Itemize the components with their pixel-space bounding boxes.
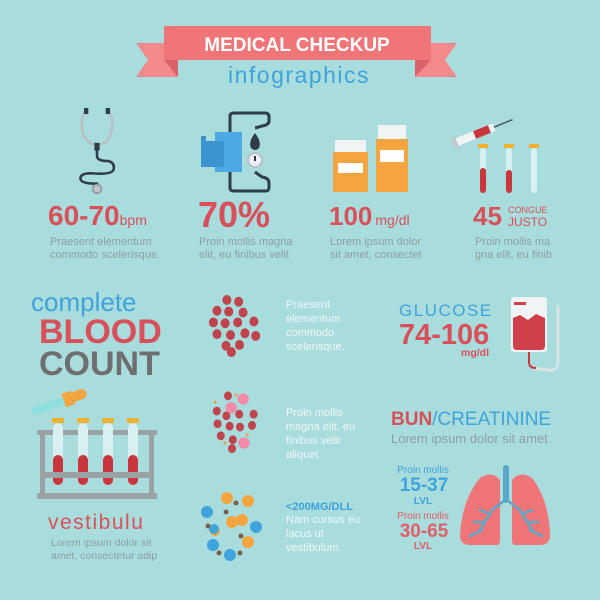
icon: blood pressure cuff	[201, 113, 269, 191]
text: cells note 2: finibus velit	[286, 435, 340, 447]
heading: complete blood count: COUNT	[39, 345, 160, 383]
text: vestibulu	[48, 511, 157, 562]
stat: heart rate	[48, 200, 160, 261]
text: cells note 3: <200MG/DLL	[286, 501, 353, 513]
icon: lungs	[460, 465, 550, 545]
text: cells note 1: scelerisque.	[286, 341, 345, 353]
icon: red blood cells	[209, 295, 260, 357]
text: cells note 3: lacus ut	[286, 528, 324, 540]
icon: mixed blood cells	[213, 391, 258, 453]
text: cells note 1: Praesent	[286, 299, 330, 311]
stat: 15-37: Proin mollis	[397, 465, 449, 476]
icon: pill bottles	[333, 125, 408, 192]
title ribbon: MEDICAL CHECKUP	[204, 35, 390, 56]
heading: bun/creatinine	[391, 409, 551, 446]
stat: 45: Proin mollis ma	[475, 236, 551, 248]
heading: complete blood count: BLOOD	[39, 313, 162, 351]
text: cells note 2: aliquet	[286, 449, 318, 461]
stat: 30-65	[397, 511, 449, 552]
heading: complete blood count: complete	[31, 287, 136, 317]
text: vestibulu: Lorem ipsum dolor sit	[51, 537, 151, 549]
icon: stethoscope	[80, 108, 114, 193]
stat: 15-37: 15-37	[400, 475, 448, 496]
text: cells note 1: elementum	[286, 313, 340, 325]
stat: 100 mg/dl: 100mg/dl	[329, 201, 410, 231]
text: cells note 1: commodo	[286, 327, 334, 339]
stat: 30-65: LVL	[414, 541, 432, 552]
stat: 15-37: LVL	[414, 496, 432, 507]
stat: 70%	[198, 194, 293, 261]
icon: dropper	[29, 386, 89, 419]
stat: glucose: mg/dl	[461, 347, 489, 359]
title ribbon	[136, 26, 457, 77]
subtitle: infographics	[228, 62, 370, 88]
heading: complete blood count	[31, 287, 162, 383]
icon: test tube rack	[37, 418, 157, 499]
stat: glucose: 74-106	[399, 319, 489, 351]
heading: bun/creatinine: BUN/CREATININE	[391, 409, 551, 430]
stat: 70%: 70%	[198, 194, 270, 235]
icon: blood bag	[511, 297, 558, 370]
stat: 70%: elit, eu finibus velit	[199, 249, 289, 261]
text: cells note 3: vestibulum.	[286, 542, 342, 554]
stat: 45: 45	[473, 201, 502, 231]
stat: 45: JUSTO	[508, 215, 547, 229]
stat: 30-65: 30-65	[400, 521, 449, 542]
stat: 100 mg/dl: sit amet, consectet	[330, 249, 422, 261]
text: cells note 2: magna elit, eu	[286, 421, 355, 433]
stat: 100 mg/dl	[329, 201, 422, 261]
text: vestibulu: amet, consectetur adip	[51, 550, 157, 562]
stat: 45	[473, 201, 552, 261]
text: cells note 1	[286, 299, 345, 353]
stat: heart rate: commodo scelerisque.	[50, 249, 160, 261]
text: cells note 3	[286, 501, 360, 554]
stat: glucose: GLUCOSE	[399, 301, 493, 320]
text: vestibulu: vestibulu	[48, 511, 144, 534]
text: cells note 2	[286, 407, 355, 461]
stat: 30-65: Proin mollis	[397, 511, 449, 522]
stat: 45: gna elit, eu finib	[475, 249, 552, 261]
heading: bun/creatinine: Lorem ipsum dolor sit amet	[391, 431, 548, 446]
stat: 100 mg/dl: Lorem ipsum dolor	[330, 236, 421, 248]
stat: heart rate: Praesent elementum	[50, 236, 152, 248]
icon: platelets cluster	[201, 492, 262, 561]
text: cells note 2: Proin mollis	[286, 407, 343, 419]
icon: syringe and test tubes	[451, 114, 539, 193]
stat: glucose	[399, 301, 493, 359]
stat: heart rate: 60-70bpm	[48, 200, 147, 231]
stat: 45: CONGUE	[508, 205, 548, 215]
stat: 70%: Proin mollis magna	[199, 236, 293, 248]
stat: 15-37	[397, 465, 449, 507]
text: cells note 3: Nam cursus eu	[286, 514, 360, 526]
